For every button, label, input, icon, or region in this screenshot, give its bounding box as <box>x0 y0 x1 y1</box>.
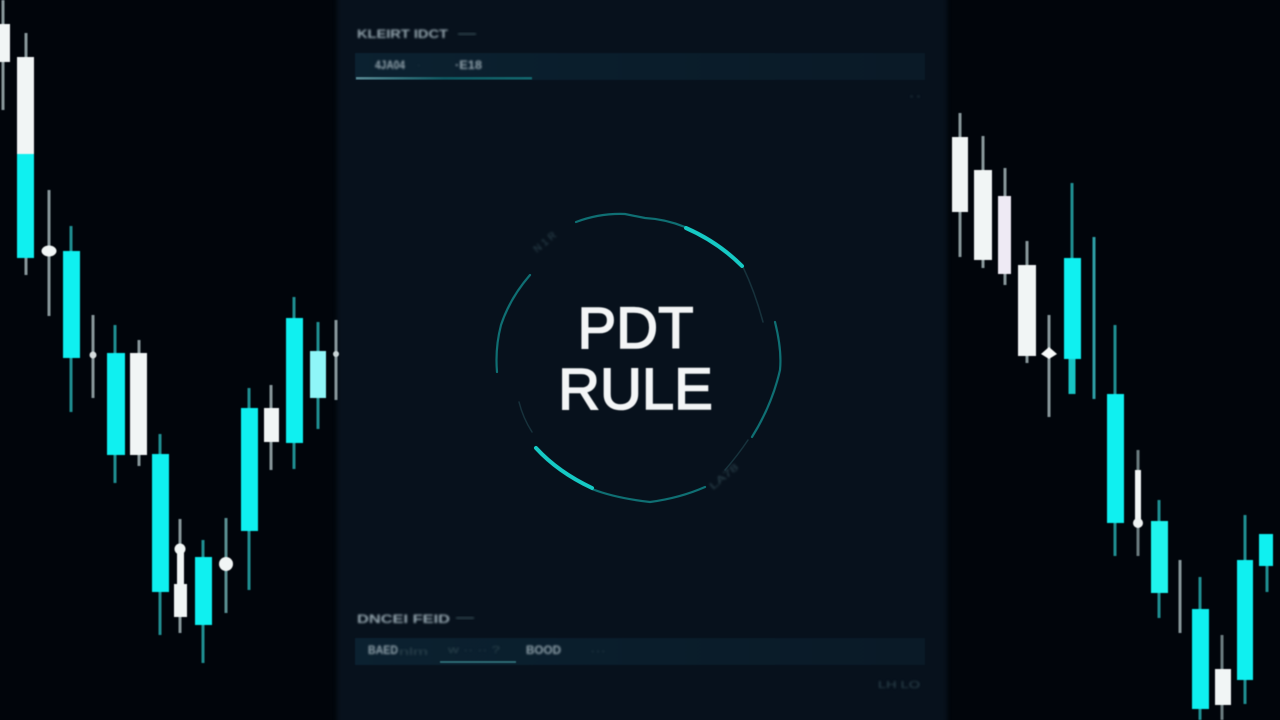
top tab bar <box>355 53 925 80</box>
thin ring arcs <box>496 214 780 502</box>
bright accent arc bottom left <box>536 448 592 488</box>
doji <box>1041 315 1057 417</box>
ring gauge <box>496 214 780 502</box>
top heading label: KLEIRT IDCT <box>357 27 449 41</box>
candle <box>310 322 326 429</box>
bottom tab bar <box>355 638 925 665</box>
candle <box>1107 325 1124 556</box>
bottom tab bar: BOOD <box>526 643 561 657</box>
bottom heading label <box>357 612 474 626</box>
bottom heading label: DNCEI FEID <box>357 612 450 626</box>
wick only <box>1178 560 1182 633</box>
title: RULE <box>558 357 713 422</box>
candle <box>241 388 258 590</box>
top heading label <box>357 27 476 41</box>
candle <box>1237 515 1253 704</box>
candle <box>1018 241 1036 363</box>
doji <box>219 518 233 613</box>
candle <box>130 340 147 466</box>
title <box>558 296 713 422</box>
bottom tab bar: w ·· ·· ? <box>446 645 501 656</box>
candle <box>998 168 1011 285</box>
candle <box>174 519 187 633</box>
bottom tab bar: BAED <box>368 643 398 657</box>
candle two-tone <box>17 33 34 275</box>
candle <box>1192 577 1209 720</box>
candle <box>0 0 10 110</box>
candle <box>286 297 303 469</box>
candle <box>1151 500 1168 618</box>
candle <box>195 540 212 663</box>
top tab bar: 4JA04 <box>375 58 405 72</box>
candlestick chart: right <box>952 113 1273 720</box>
bottom tab bar: ··· <box>590 646 606 657</box>
ring tick label lower right: LA78 <box>708 462 741 492</box>
top right faint marker: ·· <box>908 91 922 102</box>
candle <box>152 434 169 635</box>
candlestick chart: left <box>0 0 339 663</box>
dim ring arcs <box>519 267 763 470</box>
candle <box>264 385 279 470</box>
candle <box>107 325 125 483</box>
candle <box>952 113 968 257</box>
panel: central trading screen <box>337 0 947 720</box>
doji <box>42 190 56 316</box>
top tab bar: ·E18 <box>455 58 482 72</box>
doji <box>333 320 339 400</box>
bottom tab bar: nlm <box>399 647 428 658</box>
ring tick label upper left: N 1 R <box>532 230 559 255</box>
wick only <box>1092 237 1096 399</box>
candle <box>974 136 992 268</box>
candle <box>1259 534 1273 592</box>
candle <box>63 226 80 412</box>
doji <box>90 315 96 398</box>
candle <box>1133 450 1143 556</box>
bottom right faint label: LH LO <box>878 680 920 691</box>
top tab bar: · <box>417 60 420 71</box>
candle <box>1215 635 1231 720</box>
candle <box>1064 183 1081 394</box>
bright accent arc top right <box>686 228 742 266</box>
title: PDT <box>578 296 694 361</box>
